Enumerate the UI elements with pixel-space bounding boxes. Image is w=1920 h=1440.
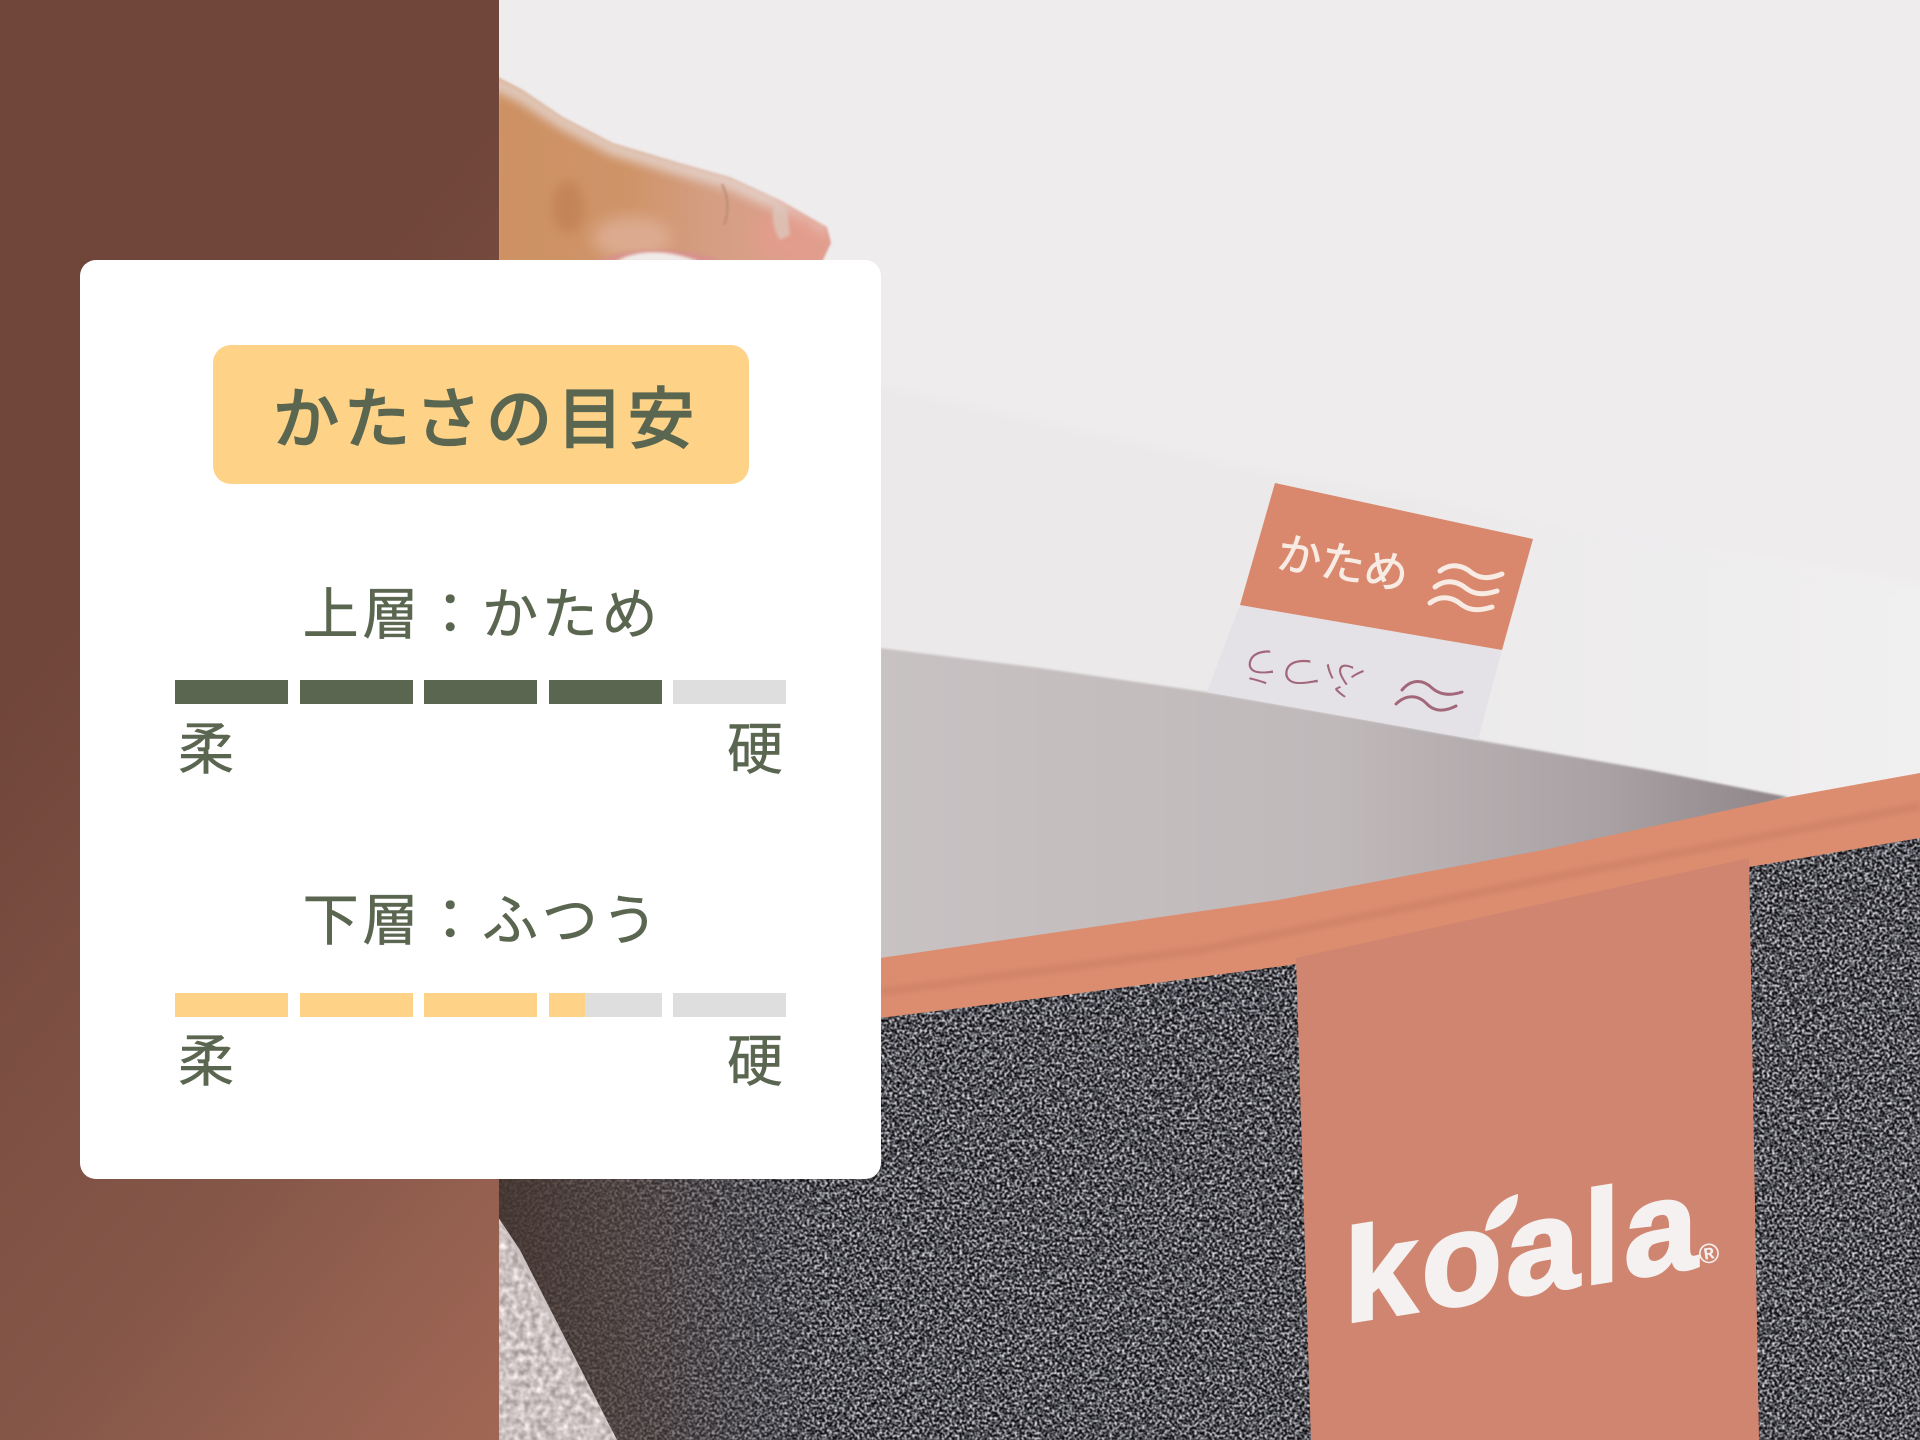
- heading badge: かたさの目安: [273, 366, 699, 462]
- lower layer scale bar: [175, 993, 786, 1017]
- upper layer scale bar: [175, 680, 786, 704]
- upper hard end label: 硬: [727, 705, 783, 786]
- mattress top surface: [498, 0, 1920, 1440]
- heading badge: [213, 345, 749, 484]
- koala logo: ®: [1696, 1237, 1722, 1270]
- upper soft end label: 柔: [178, 705, 234, 786]
- mattress white side: [700, 345, 1920, 1000]
- koala logo: koala: [1344, 1148, 1702, 1352]
- gray gap under upper layer: [880, 648, 1788, 978]
- lower layer label: 下層：ふつう: [303, 876, 661, 957]
- left brown panel: [0, 0, 499, 1440]
- firmness sewn label: かため: [1273, 517, 1414, 603]
- orange hanging tag: [1296, 858, 1759, 1440]
- lower soft end label: 柔: [178, 1017, 234, 1098]
- lower hard end label: 硬: [727, 1017, 783, 1098]
- firmness sewn label: [1207, 483, 1533, 740]
- orange mattress band: [880, 773, 1920, 1018]
- photo: koala mattress with hand: [499, 0, 1920, 1440]
- hand pressing on mattress: [490, 77, 831, 262]
- dark knit fabric: [498, 820, 1920, 1440]
- upper layer label: 上層：かため: [303, 570, 661, 651]
- panel: firmness guide card: [80, 260, 881, 1179]
- carpet corner: [498, 1217, 617, 1440]
- firmness sewn label: ふつう: [1234, 634, 1369, 716]
